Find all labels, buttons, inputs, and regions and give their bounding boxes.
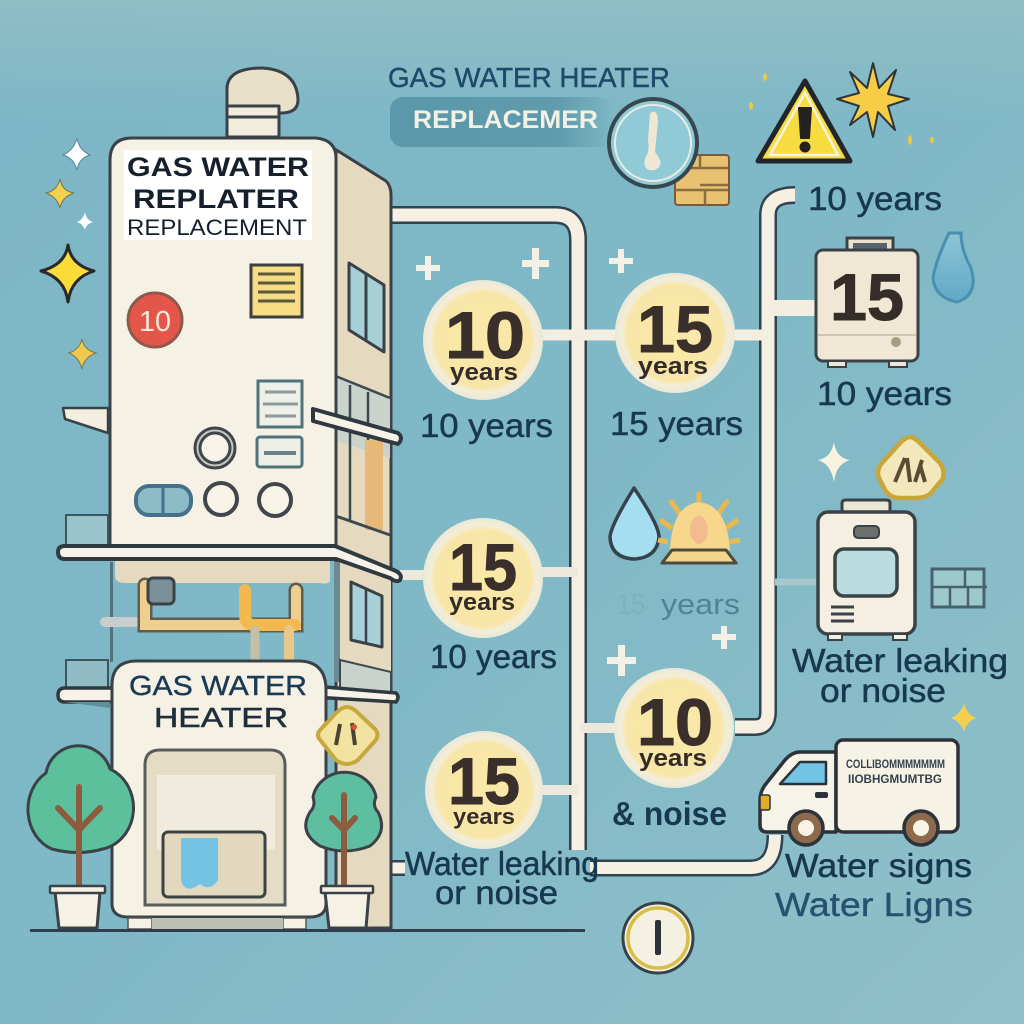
- ground line: [30, 929, 585, 932]
- delivery truck: [760, 740, 958, 845]
- label water leaking right: or noise: [820, 672, 946, 709]
- coin 10 years lower: [614, 668, 734, 788]
- coin 15 years lower: years: [453, 804, 515, 829]
- coin 10 years: years: [450, 359, 518, 386]
- label water leaking centre: [405, 845, 599, 911]
- coin 15 years middle: 15: [449, 530, 517, 604]
- label noise: & noise: [612, 795, 727, 832]
- label water leaking centre: or noise: [435, 874, 558, 911]
- heater title: [129, 670, 307, 733]
- panel title: GAS WATER: [127, 152, 309, 182]
- replacement banner: [390, 97, 612, 147]
- white sparkle: [818, 442, 850, 482]
- window icon right: [932, 569, 987, 607]
- coin 15 years middle: [423, 518, 543, 638]
- dials: [136, 428, 291, 516]
- control plates: [257, 381, 302, 467]
- tree right: [306, 772, 382, 928]
- label water ligns: Water Ligns: [775, 886, 973, 923]
- warning badge: [318, 707, 378, 764]
- sparkles left: [41, 138, 96, 369]
- delivery truck: COLLIBOMMMMMMM: [846, 759, 945, 771]
- lower shelf strips: [58, 686, 398, 708]
- under heater: [105, 560, 391, 682]
- coin 15 years: years: [638, 353, 708, 380]
- label 10 years a: 10 years: [420, 407, 553, 444]
- coin 10 years: 10: [445, 298, 525, 372]
- magnifier icon: [609, 99, 729, 205]
- red badge 10: [128, 293, 182, 347]
- replacement banner: REPLACEMER: [413, 106, 598, 134]
- header title: GAS WATER HEATER: [388, 62, 670, 93]
- side windows: [349, 263, 384, 352]
- coin 15 years lower: 15: [448, 744, 520, 818]
- rear shelves: [63, 408, 108, 547]
- plus sparkles: [416, 248, 736, 676]
- middle shelf: [58, 546, 401, 581]
- water drop upper: [933, 233, 973, 302]
- info circle bottom: [623, 903, 693, 973]
- lower gas water heater: [112, 661, 326, 929]
- side wall: [330, 146, 391, 928]
- sun star: [837, 63, 909, 137]
- water drop: [610, 488, 659, 559]
- label 10 years right: 10 years: [817, 375, 952, 412]
- pipework: [105, 578, 296, 660]
- coin 15 years lower: [425, 731, 543, 849]
- coin 15 years middle: years: [449, 589, 515, 616]
- label water leaking right: Water leaking: [792, 642, 1008, 679]
- warning triangle: [758, 81, 850, 161]
- panel title: REPLATER: [133, 184, 299, 214]
- main front panel: [110, 138, 336, 550]
- delivery truck: IIOBHGMUMTBG: [848, 774, 942, 786]
- faded label 15 years: 15: [617, 589, 645, 621]
- faded label 15 years: [617, 589, 740, 621]
- heater icon lower: [818, 500, 915, 640]
- label water leaking centre: Water leaking: [405, 845, 599, 882]
- right balcony upper: [313, 409, 401, 444]
- sun bell: [658, 492, 740, 563]
- coin 15 years: 15: [637, 292, 713, 366]
- gas water heater tower: [58, 68, 401, 928]
- coin 15 years: [615, 273, 735, 393]
- label water leaking right: [792, 642, 1008, 709]
- small yellow dots: [749, 73, 934, 145]
- warning badge right: [878, 437, 944, 498]
- panel title: REPLACEMENT: [127, 215, 307, 240]
- heater icon 15: 15: [830, 260, 904, 334]
- yellow vent: [251, 265, 302, 317]
- panel title: [124, 150, 312, 240]
- label 15 years b: 15 years: [610, 405, 743, 442]
- connector pipes: [362, 195, 818, 868]
- heater icon 15: [816, 238, 918, 367]
- faded label 15 years: years: [661, 589, 740, 621]
- red badge 10: 10: [139, 306, 171, 338]
- top right years: 10 years: [808, 180, 942, 217]
- coin 10 years: [423, 280, 543, 400]
- coin 10 years lower: years: [639, 745, 707, 772]
- side balcony rail: [333, 375, 390, 535]
- tree left: [28, 746, 134, 928]
- label 10 years c: 10 years: [430, 638, 557, 675]
- heater title: GAS WATER: [129, 670, 307, 701]
- appliance front: [145, 750, 285, 905]
- heater title: HEATER: [154, 702, 288, 733]
- lower rail: [66, 660, 391, 700]
- feet: [128, 918, 306, 929]
- label water signs: Water signs: [785, 847, 972, 884]
- flue pipe: [227, 68, 298, 137]
- coin 10 years lower: 10: [637, 685, 713, 759]
- yellow sparkle: [951, 703, 976, 732]
